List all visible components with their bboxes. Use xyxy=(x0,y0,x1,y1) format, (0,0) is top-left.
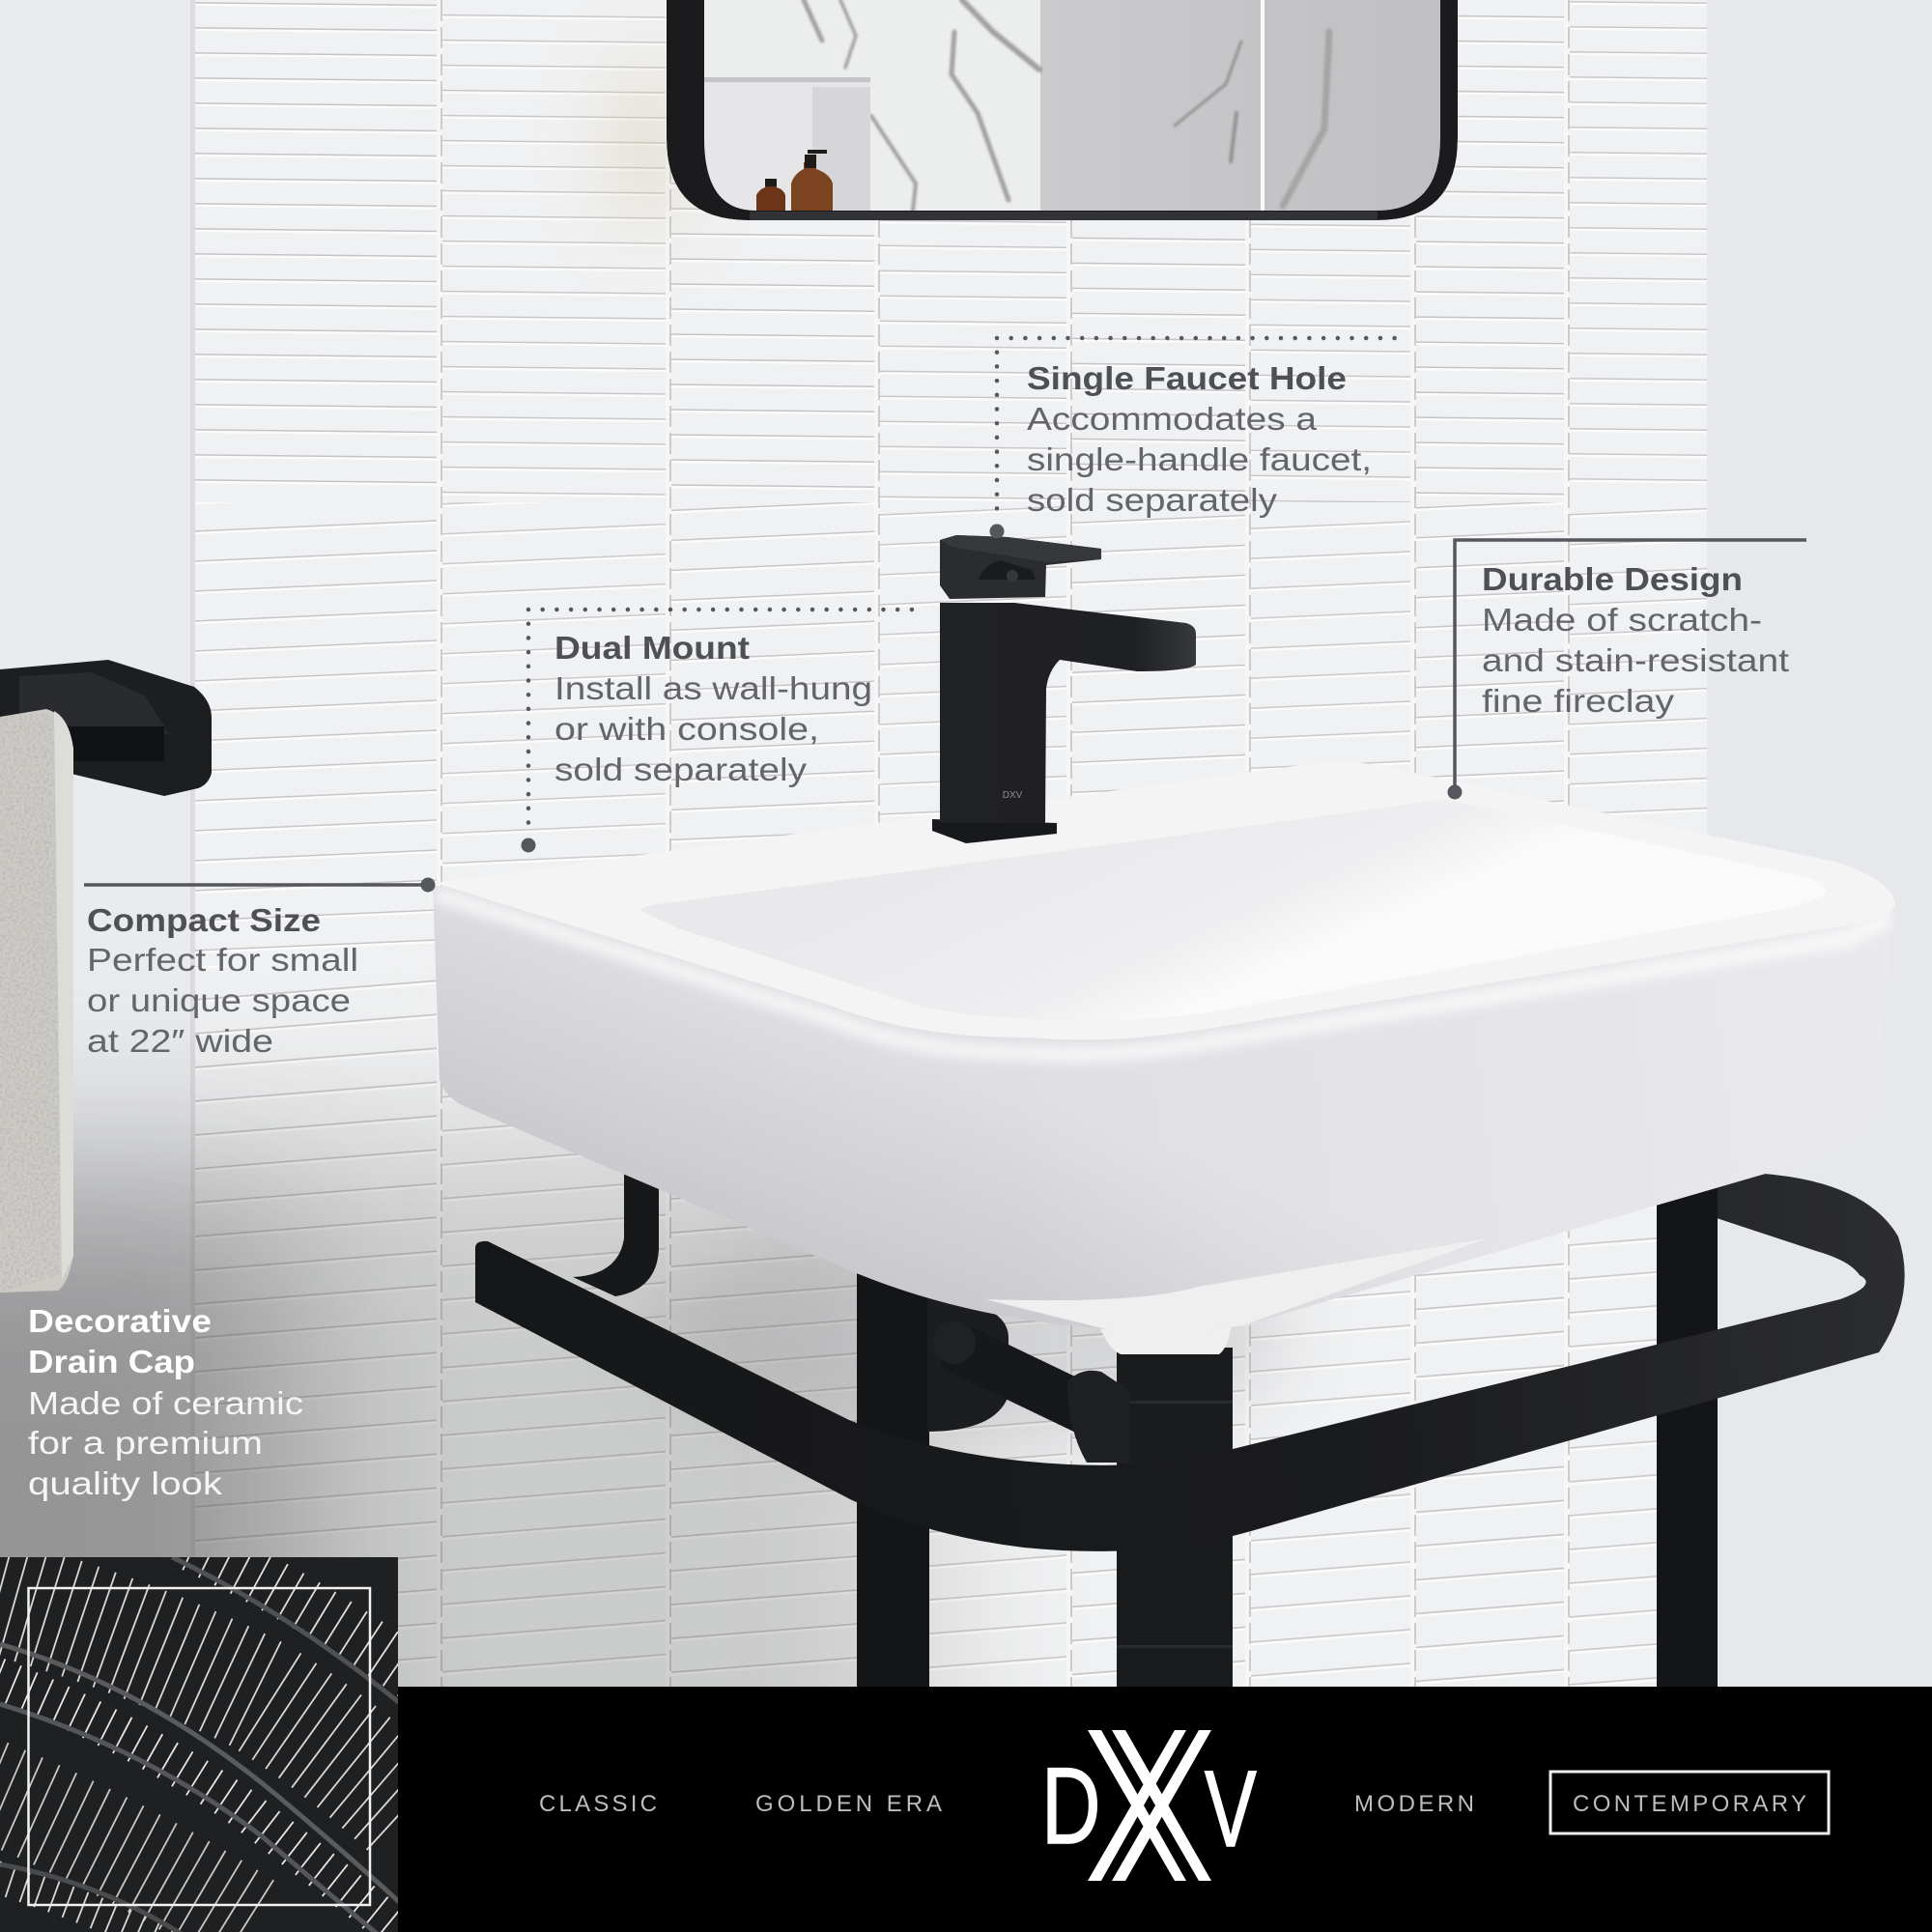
wall flange xyxy=(927,1297,1009,1432)
callout: dual mount: Install as wall-hung xyxy=(554,670,872,706)
callout: decorative drain cap: Made of ceramic xyxy=(28,1385,303,1421)
marble veins xyxy=(804,0,1329,211)
tile wall xyxy=(190,0,1707,1690)
basin xyxy=(639,801,1826,1021)
rim glow xyxy=(435,894,1889,1055)
footer label: classic: CLASSIC xyxy=(539,1791,657,1817)
callout: dual mount: or with console, xyxy=(554,711,819,747)
console legs and drain pipes xyxy=(857,1183,1718,1687)
p-trap pipe xyxy=(951,1345,1092,1412)
towel bar arm xyxy=(573,1173,659,1296)
callout: durable design: and stain-resistant xyxy=(1482,642,1789,678)
callout: durable design xyxy=(1447,540,1806,800)
mirror frame xyxy=(667,0,1458,220)
DXV logo: D xyxy=(1041,1747,1100,1867)
callout: decorative drain cap: Decorative xyxy=(28,1303,212,1339)
towel xyxy=(0,709,73,1293)
callout: decorative drain cap xyxy=(28,1303,303,1501)
callout: single faucet hole xyxy=(989,338,1403,539)
console towel bar xyxy=(475,1159,1905,1551)
amber bottles xyxy=(756,150,833,212)
drain neck xyxy=(1096,1319,1233,1354)
sink underside xyxy=(985,1238,1488,1333)
callout: single faucet hole: sold separately xyxy=(1027,482,1278,518)
inset photo: drain cap detail xyxy=(0,1546,415,1932)
left leg xyxy=(857,1273,929,1687)
faucet logo: DXV xyxy=(1003,790,1023,801)
callout: durable design: Durable Design xyxy=(1482,561,1743,597)
footer label: golden era: GOLDEN ERA xyxy=(755,1791,942,1817)
callout: single faucet hole: Single Faucet Hole xyxy=(1027,360,1347,396)
callout: single faucet hole: Accommodates a xyxy=(1027,401,1318,437)
sink front face xyxy=(433,886,1895,1331)
callout: dual mount xyxy=(522,610,918,852)
footer label: contemporary (selected) xyxy=(1550,1772,1829,1833)
DXV logo: V xyxy=(1205,1748,1257,1869)
footer label: modern: MODERN xyxy=(1354,1791,1474,1817)
callout: durable design: Made of scratch- xyxy=(1482,602,1762,638)
sink top surface xyxy=(435,761,1895,1039)
center drain pipe xyxy=(1117,1348,1233,1687)
faucet xyxy=(932,535,1196,843)
callout: compact size: at 22″ wide xyxy=(87,1023,273,1059)
callout: decorative drain cap: for a premium xyxy=(28,1425,263,1461)
callout: compact size: Compact Size xyxy=(87,902,321,938)
right leg xyxy=(1657,1183,1718,1687)
callout: decorative drain cap: Drain Cap xyxy=(28,1344,195,1379)
callout: single faucet hole: single-handle faucet, xyxy=(1027,441,1372,477)
callout: decorative drain cap: quality look xyxy=(28,1465,223,1501)
callout: dual mount: Dual Mount xyxy=(554,630,750,666)
faucet body and spout xyxy=(940,603,1196,823)
footer label: contemporary (selected): CONTEMPORARY xyxy=(1573,1791,1806,1817)
callout: durable design: fine fireclay xyxy=(1482,683,1675,719)
callout: compact size: Perfect for small xyxy=(87,942,358,978)
faucet handle xyxy=(940,535,1101,599)
footer bar xyxy=(398,1687,1932,1932)
mirror xyxy=(666,0,1458,222)
callout: compact size: or unique space xyxy=(87,982,351,1018)
DXV logo xyxy=(1041,1730,1257,1881)
callout: dual mount: sold separately xyxy=(554,752,808,787)
mirror niche shelf xyxy=(704,77,870,212)
inset white frame xyxy=(29,1588,370,1905)
wall shading xyxy=(0,58,1285,1913)
sink xyxy=(433,761,1895,1354)
right leg upper section xyxy=(1657,1183,1718,1256)
callout: compact size xyxy=(84,877,435,1059)
faucet base xyxy=(932,819,1057,843)
towel ring bracket xyxy=(0,660,212,796)
trap elbow xyxy=(1067,1371,1130,1463)
